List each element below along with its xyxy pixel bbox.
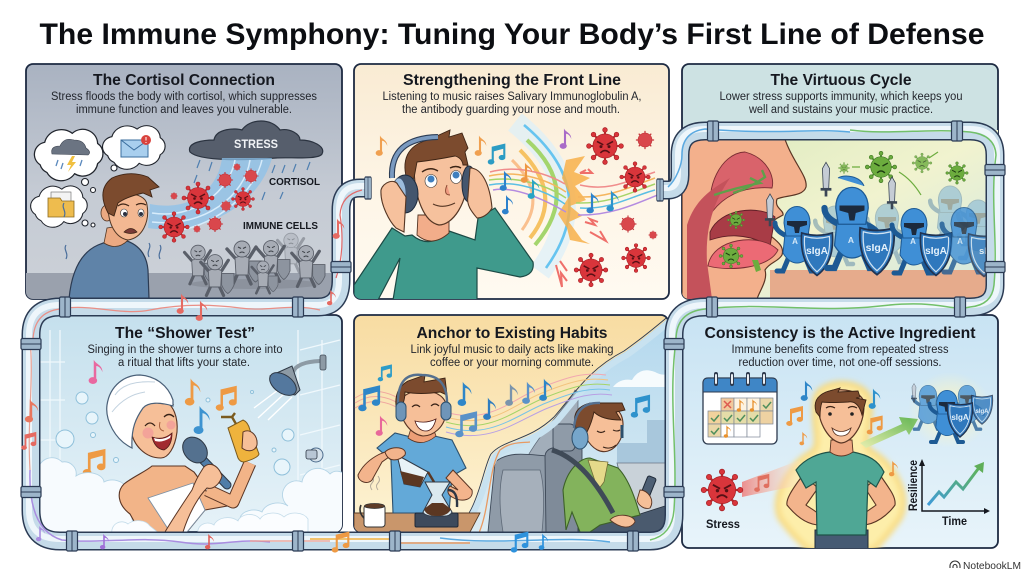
faded background knights (815, 186, 1000, 264)
body text: a ritual that lifts your state. (118, 357, 250, 369)
knights group: sIgA (951, 413, 969, 422)
icon: stress virus (701, 469, 743, 511)
axis label: time: Time (942, 516, 967, 528)
rainbow shield (512, 122, 569, 272)
shampoo bottle (228, 420, 259, 462)
cortisol stream (148, 158, 310, 231)
man standing strong (787, 388, 895, 550)
chest towel (148, 483, 205, 532)
knights group (908, 372, 993, 448)
axis label: resilience: Resilience (908, 460, 920, 511)
knight 4 (942, 208, 1000, 276)
torso (119, 466, 233, 532)
heading: The Cortisol Connection (93, 72, 275, 89)
knights with sIgA shields (765, 162, 1000, 276)
label: cortisol: CORTISOL (269, 176, 321, 188)
music notes (358, 364, 650, 437)
face (414, 153, 468, 225)
right hand (468, 168, 492, 218)
bubbles (56, 390, 294, 475)
knight 1: A (792, 237, 798, 246)
music notes (83, 360, 237, 476)
worried man (63, 174, 161, 299)
body text (410, 344, 614, 369)
burst (558, 156, 590, 244)
panel: the cortisol connection (26, 64, 342, 299)
heading: Anchor to Existing Habits (416, 325, 608, 342)
wavy staves (355, 374, 612, 436)
hair (405, 130, 468, 183)
body text: Singing in the shower turns a chore into (88, 344, 282, 356)
music notes (376, 129, 619, 214)
body text (732, 344, 949, 369)
knight 2: sIgA (866, 242, 889, 254)
knight 4: sIg (979, 246, 993, 257)
knight 1: sIgA (806, 246, 828, 257)
body text: reduction over time, not one-off sessions. (738, 357, 942, 369)
label: stress: Stress (706, 517, 740, 531)
gray immune cells (184, 233, 325, 295)
heading: The Virtuous Cycle (770, 72, 912, 89)
glass carafe being poured (397, 455, 428, 487)
body text: immune function and leaves you vulnerable. (76, 104, 292, 116)
sound waves (489, 169, 660, 215)
panel: the shower test (26, 315, 344, 540)
body text: Immune benefits come from repeated stress (732, 344, 949, 356)
shirt (354, 208, 533, 300)
green viruses (838, 151, 968, 195)
face (131, 400, 177, 458)
knight 2: A (848, 235, 854, 245)
pipe music notes (21, 219, 548, 553)
body text (720, 91, 962, 116)
bottle arm (207, 463, 250, 502)
panel: strengthening the front line (354, 64, 669, 300)
thought bubbles (31, 126, 165, 227)
glow (778, 384, 904, 550)
face profile (682, 130, 806, 299)
knight 3: A (910, 237, 916, 246)
icon: folder (48, 192, 74, 217)
green arrow (860, 417, 918, 448)
body text: Lower stress supports immunity, which keeps you (720, 91, 962, 103)
colored flow lines (29, 129, 996, 544)
connected pipe loop (21, 121, 1005, 553)
table and coffee gear (354, 476, 480, 532)
panel: consistency is the active ingredient (682, 315, 998, 550)
body text: Link joyful music to daily acts like making (410, 344, 614, 356)
knight 3: sIgA (925, 246, 947, 257)
panel: the virtuous cycle (682, 64, 1000, 300)
icon: stress cloud (189, 121, 323, 160)
commute scene background (448, 315, 672, 534)
scene: sIgA guards in the mouth (682, 130, 1000, 300)
stress beam (742, 460, 800, 497)
foreground foam (112, 513, 308, 534)
body text: coffee or your morning commute. (430, 357, 594, 369)
couplings (21, 121, 1005, 551)
icon: storm (52, 139, 90, 172)
music notes (754, 381, 898, 492)
pour-over coffee maker (415, 513, 458, 527)
body text: well and sustains your music practice. (748, 104, 933, 116)
knight 1 (765, 194, 833, 275)
icon: envelope (121, 135, 151, 157)
viruses (574, 128, 658, 287)
body text (51, 91, 317, 116)
resilience chart (908, 459, 990, 528)
branding: NotebookLM: NotebookLM (963, 560, 1021, 572)
label: immune cells: IMMUNE CELLS (243, 220, 318, 232)
microphone (203, 460, 227, 485)
body text (88, 344, 282, 369)
left hand (381, 181, 406, 232)
title: The Immune Symphony: Tuning Your Body’s First Line of Defense (40, 18, 984, 51)
knight 2 (821, 162, 894, 275)
heading: The “Shower Test” (115, 325, 255, 342)
neck (417, 215, 449, 241)
foam (38, 458, 344, 534)
body text (382, 91, 642, 116)
man with headphones (354, 130, 533, 300)
lightning sparks (556, 169, 606, 287)
heading: Consistency is the Active Ingredient (704, 325, 976, 342)
shower head and water (254, 355, 326, 420)
knight 4: A (957, 237, 963, 246)
body text: Listening to music raises Salivary Immunoglobulin A, (382, 91, 642, 103)
knight 3 (887, 177, 952, 275)
man pouring coffee (358, 375, 472, 527)
wall valve (306, 448, 323, 462)
divider pipe swoosh (447, 314, 674, 535)
ear cups (396, 174, 418, 214)
body text: Stress floods the body with cortisol, which suppresses (51, 91, 317, 103)
singing woman (107, 375, 259, 532)
head towel (107, 375, 173, 448)
man in car with phone (552, 403, 668, 534)
icon: calendar (703, 374, 777, 444)
mic arm and hand (165, 464, 222, 532)
viruses (159, 163, 259, 242)
heading: Strengthening the Front Line (403, 72, 621, 89)
knights group: sIgA (975, 409, 989, 415)
body text: the antibody guarding your nose and mouth. (402, 104, 620, 116)
panel: anchor to existing habits (354, 314, 674, 535)
icon: stress cloud: STRESS (234, 137, 278, 151)
